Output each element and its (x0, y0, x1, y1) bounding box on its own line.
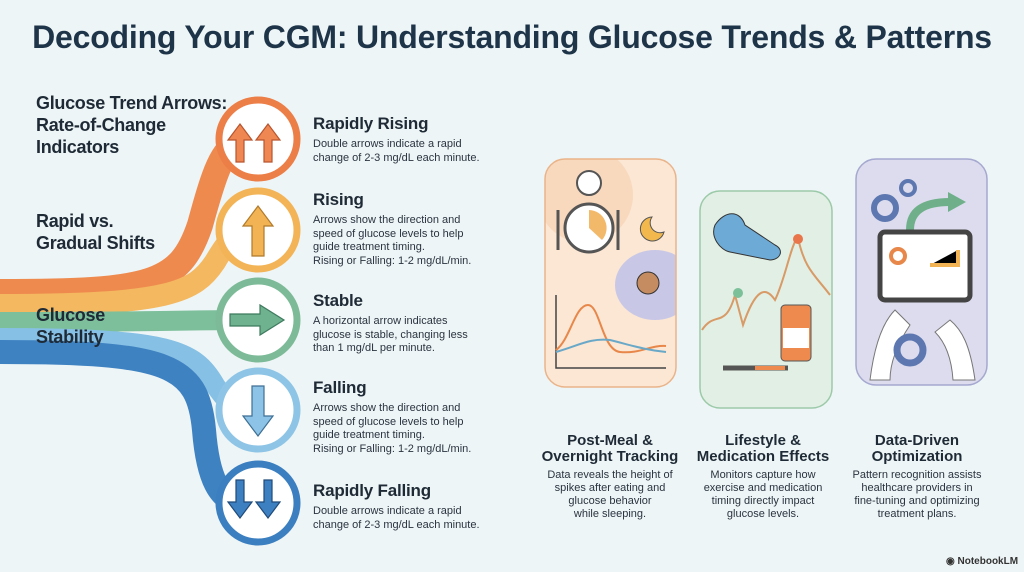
caption: post-meal: spikes after eating and (555, 482, 665, 494)
left label: glucose trend arrows: Glucose Trend Arrows: (36, 93, 227, 113)
circle: rising (219, 191, 297, 269)
caption: post-meal: while sleeping. (574, 508, 646, 520)
panel: data-driven (856, 159, 987, 385)
text: rapidly rising: change of 2-3 mg/dL each minute. (313, 152, 480, 164)
left label: stability (36, 305, 105, 347)
text: falling: Falling (313, 378, 366, 397)
caption: lifestyle: exercise and medication (704, 482, 822, 494)
panel: post-meal (544, 158, 677, 388)
panels illustrations (544, 158, 988, 409)
caption: data-driven: Pattern recognition assists (852, 469, 982, 481)
text: stable: A horizontal arrow indicates (313, 315, 448, 327)
left label: glucose trend arrows (36, 93, 227, 157)
text: rapidly falling: change of 2-3 mg/dL each minute. (313, 518, 480, 530)
text: stable: than 1 mg/dL per minute. (313, 342, 435, 354)
caption: lifestyle: glucose levels. (727, 508, 799, 520)
caption: post-meal: Data reveals the height of (547, 469, 673, 481)
left label: rapid vs gradual (36, 211, 155, 253)
caption: data-driven: treatment plans. (878, 508, 956, 520)
caption: lifestyle (697, 432, 829, 520)
left label: rapid vs gradual: Rapid vs. (36, 211, 113, 231)
caption: data-driven: Optimization (872, 448, 962, 465)
circle: rapidly rising (219, 100, 297, 178)
left label: glucose trend arrows: Rate-of-Change (36, 115, 166, 135)
text: rising (313, 190, 471, 266)
caption: data-driven (852, 432, 982, 520)
caption: data-driven: Data-Driven (875, 432, 959, 449)
caption: lifestyle: Monitors capture how (710, 469, 816, 481)
caption: post-meal: Overnight Tracking (542, 448, 678, 465)
text: rising: guide treatment timing. (313, 241, 425, 253)
left label: stability: Stability (36, 327, 103, 347)
text: rising: speed of glucose levels to help (313, 228, 463, 240)
circle: rapidly falling (219, 464, 297, 542)
caption: post-meal: Post-Meal & (567, 432, 653, 449)
text: falling: guide treatment timing. (313, 429, 425, 441)
text: stable: Stable (313, 291, 363, 310)
text: rapidly rising (313, 114, 480, 164)
text: rising: Arrows show the direction and (313, 214, 460, 226)
text: falling (313, 378, 471, 454)
text: stable (313, 291, 468, 354)
title: Decoding Your CGM: Understanding Glucose Trends & Patterns (32, 19, 992, 55)
caption: data-driven: fine-tuning and optimizing (854, 495, 980, 507)
text: rapidly falling (313, 481, 480, 530)
text: rapidly rising: Double arrows indicate a rapid (313, 138, 462, 150)
text: stable: glucose is stable, changing less (313, 328, 468, 340)
caption: lifestyle: Medication Effects (697, 448, 829, 465)
logo: NotebookLM: ◉ NotebookLM (946, 556, 1018, 567)
caption: lifestyle: Lifestyle & (725, 432, 801, 449)
text: rapidly falling: Double arrows indicate a rapid (313, 505, 462, 517)
band: streams (0, 142, 240, 503)
text: falling: speed of glucose levels to help (313, 416, 463, 428)
circle: stable (219, 281, 297, 359)
left label: glucose trend arrows: Indicators (36, 137, 119, 157)
diagram: trend arrow flow (0, 96, 300, 546)
text: rising: Rising (313, 190, 364, 209)
caption: lifestyle: timing directly impact (712, 495, 814, 507)
caption: post-meal: glucose behavior (568, 495, 652, 507)
text: falling: Arrows show the direction and (313, 402, 460, 414)
text: falling: Rising or Falling: 1-2 mg/dL/min. (313, 442, 471, 454)
left label: stability: Glucose (36, 305, 105, 325)
panel: lifestyle (700, 191, 832, 408)
caption: post-meal (542, 432, 678, 520)
text: rising: Rising or Falling: 1-2 mg/dL/min. (313, 254, 471, 266)
text: rapidly rising: Rapidly Rising (313, 114, 428, 133)
caption: data-driven: healthcare providers in (861, 482, 973, 494)
text: rapidly falling: Rapidly Falling (313, 481, 431, 500)
circle: falling (219, 371, 297, 449)
left label: rapid vs gradual: Gradual Shifts (36, 233, 155, 253)
